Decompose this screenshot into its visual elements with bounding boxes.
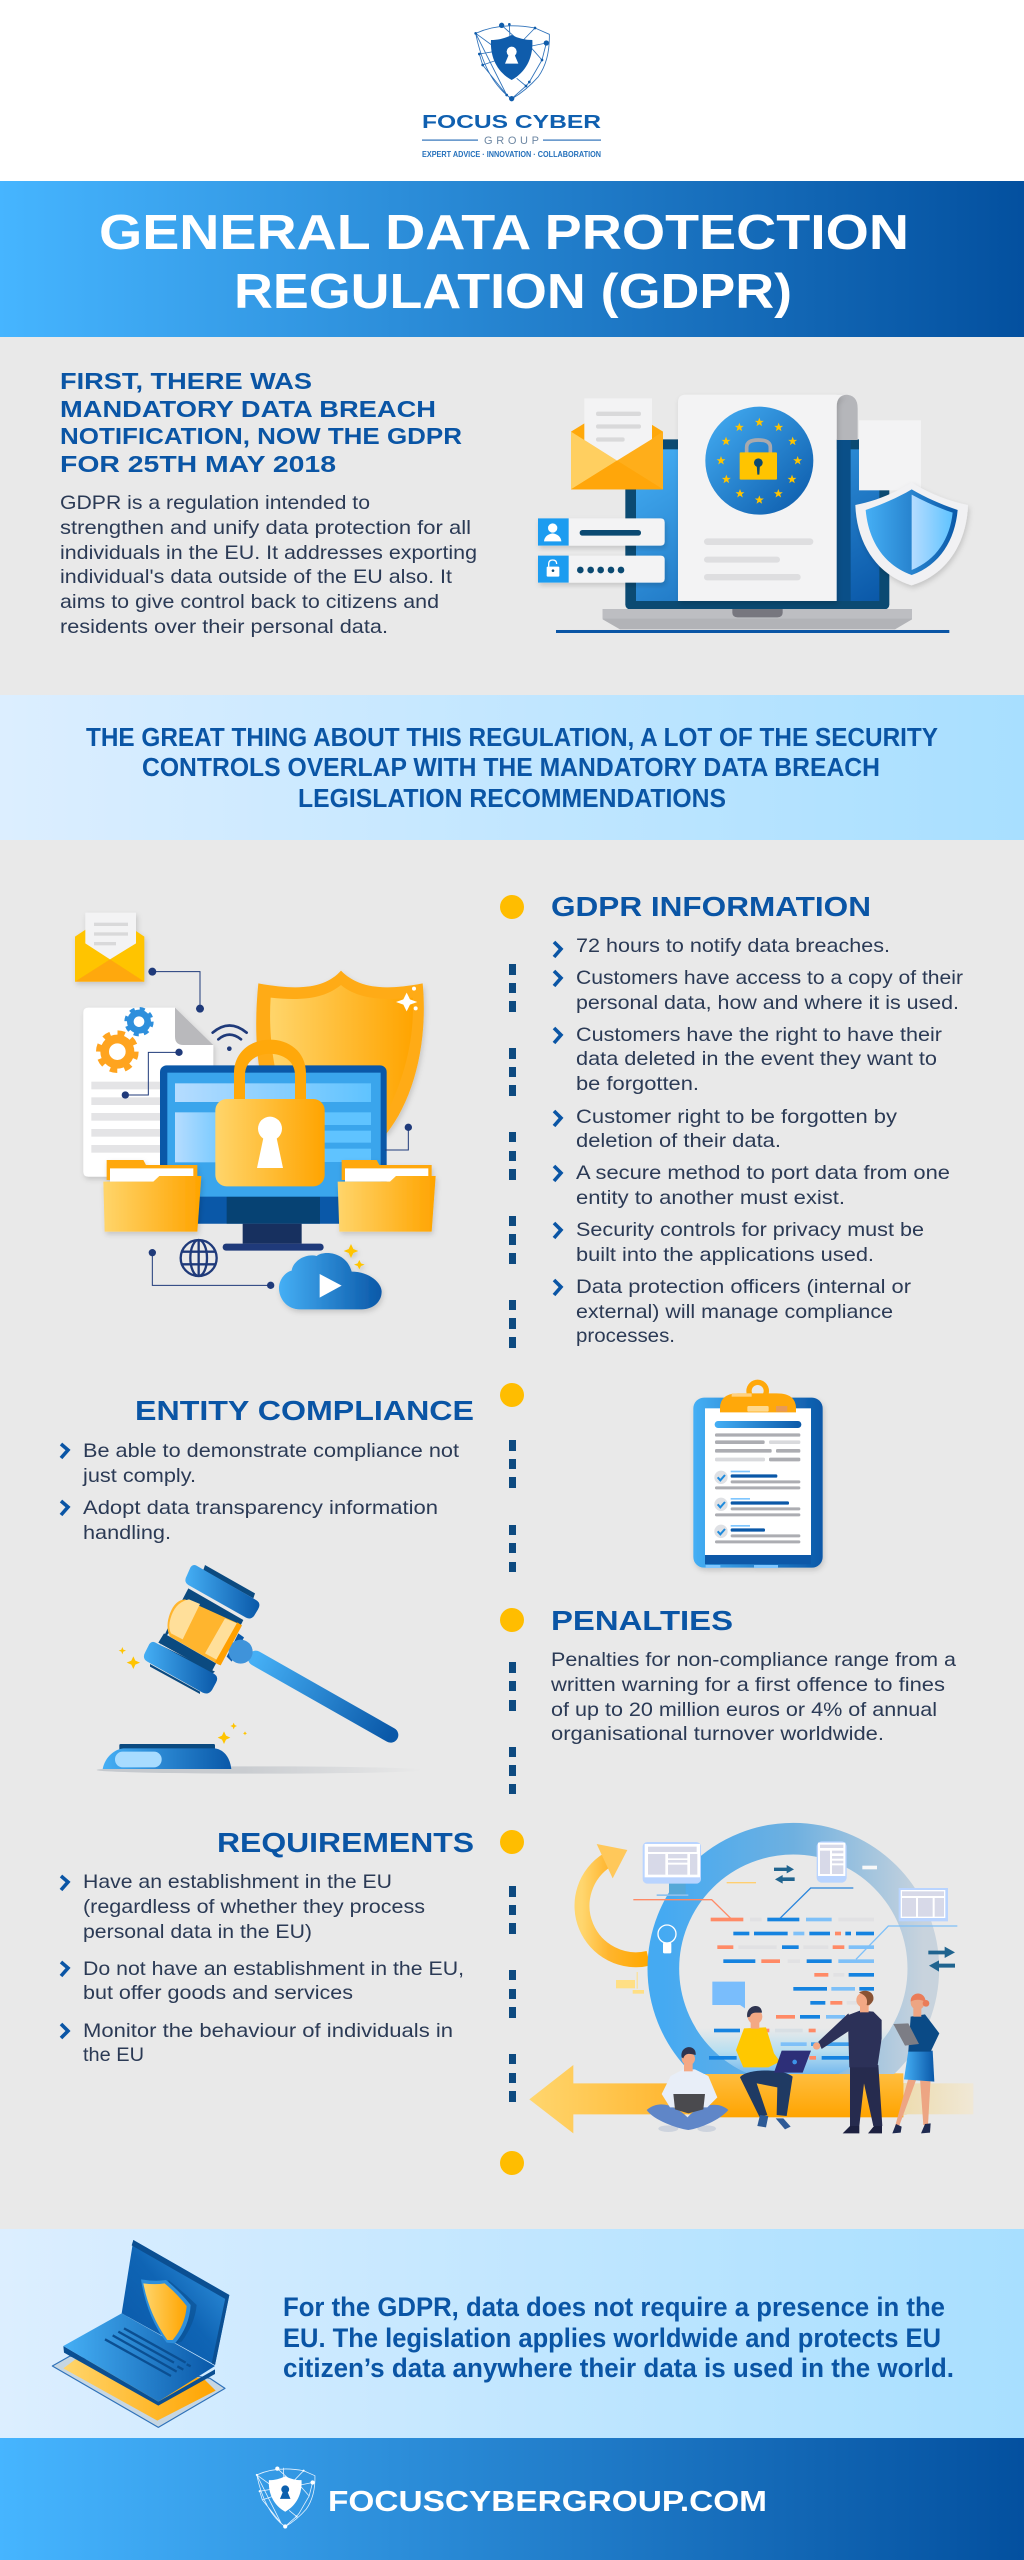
laptop base [63, 2313, 215, 2406]
list text: processes. [576, 1325, 675, 1347]
bullet marks [554, 942, 561, 1295]
list text: Do not have an establishment in the EU, [83, 1958, 464, 1980]
penalties text: Penalties for non-compliance range from a [551, 1649, 956, 1671]
list text: personal data in the EU) [83, 1921, 312, 1943]
closing band [0, 2229, 1024, 2438]
penalties text: written warning for a first offence to fines [550, 1674, 945, 1696]
EU badge with lock [705, 407, 813, 515]
intro body text: GDPR is a regulation intended to [60, 492, 370, 514]
clip [720, 1382, 796, 1412]
icon: swap arrows right [928, 1947, 955, 1972]
check item 2 [714, 1498, 800, 1516]
title: GENERAL DATA PROTECTION [99, 206, 909, 260]
illustration: laptop with EU privacy document [538, 395, 968, 633]
list text: just comply. [82, 1465, 196, 1487]
connector: globe to cloud [149, 1249, 274, 1289]
icon: wifi [213, 1025, 247, 1051]
sound block [97, 1744, 423, 1774]
logo header [0, 0, 1024, 181]
connector: email to document [148, 968, 204, 1013]
circular orange arrow [582, 1844, 648, 1994]
code lines [709, 1918, 874, 2060]
heading: entity compliance: ENTITY COMPLIANCE [135, 1395, 474, 1426]
clipboard board [693, 1398, 823, 1568]
check item 3 [714, 1525, 800, 1543]
list text: deletion of their data. [576, 1130, 781, 1152]
laptop [556, 439, 949, 633]
heading: requirements: REQUIREMENTS [217, 1827, 474, 1858]
gavel head [144, 1565, 259, 1694]
list text: Customer right to be forgotten by [576, 1106, 897, 1128]
title: REGULATION (GDPR) [234, 265, 792, 319]
list text: Adopt data transparency information [83, 1497, 438, 1519]
clipboard lines [715, 1421, 801, 1461]
intro heading: NOTIFICATION, NOW THE GDPR [60, 423, 462, 449]
title banner [0, 181, 1024, 337]
heading: GDPR information: GDPR INFORMATION [551, 891, 871, 922]
icon: monitor device [643, 1842, 701, 1896]
shield [256, 971, 424, 1133]
heading: penalties: PENALTIES [551, 1605, 733, 1636]
timeline [500, 895, 524, 2175]
intro body text [60, 492, 477, 638]
icon: phone device [817, 1841, 847, 1883]
logo tagline: EXPERT ADVICE · INNOVATION · COLLABORATION [422, 150, 601, 159]
right white tab [859, 420, 921, 490]
login field: user [538, 518, 665, 546]
requirements list [61, 1871, 464, 2066]
illustration: gavel [97, 1565, 423, 1774]
speech bubble [712, 1982, 745, 2008]
callout text: LEGISLATION RECOMMENDATIONS [298, 785, 726, 813]
callout text: THE GREAT THING ABOUT THIS REGULATION, A LOT OF THE SECURITY [86, 724, 938, 752]
list text: Have an establishment in the EU [83, 1871, 392, 1893]
intro heading [60, 368, 462, 477]
GDPR information list [554, 935, 964, 1347]
footer logo [256, 2466, 315, 2529]
illustration: laptop with shield [52, 2240, 229, 2427]
list text: Customers have access to a copy of their [576, 967, 964, 989]
closing text: citizen’s data anywhere their data is used in the world. [283, 2353, 954, 2383]
closing text [283, 2292, 954, 2383]
list text: but offer goods and services [83, 1982, 353, 2004]
list text: handling. [83, 1522, 171, 1544]
shield on screen [141, 2279, 197, 2343]
person: woman with tablet [892, 1994, 939, 2133]
right folder [338, 1160, 436, 1232]
connector: shield to monitor [385, 1124, 412, 1150]
list text: personal data, how and where it is used. [576, 992, 959, 1014]
list text: A secure method to port data from one [576, 1162, 950, 1184]
monitor [160, 1065, 387, 1251]
list text: 72 hours to notify data breaches. [576, 935, 890, 957]
callout text [86, 724, 938, 813]
large arrow [529, 2065, 973, 2133]
list text [83, 1871, 464, 2066]
callout lines [633, 1883, 957, 1959]
person: seated man with laptop [647, 2047, 728, 2132]
data ring [663, 1839, 923, 2099]
sheet under laptop [52, 2356, 225, 2427]
document with gears [83, 1008, 213, 1177]
padlock [215, 1040, 325, 1186]
white dash [862, 1866, 877, 1869]
email envelope [75, 913, 144, 982]
icon: orange gear [99, 1033, 136, 1070]
intro heading: FOR 25TH MAY 2018 [60, 451, 336, 477]
gavel handle [227, 1633, 391, 1735]
bullet marks [61, 1876, 68, 2038]
list text: entity to another must exist. [576, 1187, 845, 1209]
list text: Security controls for privacy must be [576, 1219, 924, 1241]
icon: swap arrows top [774, 1865, 795, 1884]
title [99, 206, 909, 319]
penalties text [550, 1649, 956, 1745]
icon: blue gear [126, 1009, 152, 1034]
callout text: CONTROLS OVERLAP WITH THE MANDATORY DATA BREACH [142, 754, 880, 782]
illustration: team and data ring [529, 1839, 973, 2133]
penalties text: organisational turnover worldwide. [551, 1723, 884, 1745]
intro heading: MANDATORY DATA BREACH [60, 396, 436, 422]
icon: window device [899, 1888, 948, 1921]
envelope [571, 398, 663, 489]
login field: password [538, 556, 665, 583]
entity compliance list [61, 1440, 460, 1544]
list text [82, 1440, 460, 1544]
connector: document [122, 1049, 183, 1099]
logo sub-brand: GROUP [484, 135, 539, 147]
intro body text: individuals in the EU. It addresses exporting [60, 542, 477, 564]
footer [0, 2438, 1024, 2560]
icon: light bulb [658, 1925, 676, 1953]
bullet marks [61, 1444, 68, 1515]
left folder [103, 1160, 201, 1232]
list text: Customers have the right to have their [576, 1024, 943, 1046]
closing text: EU. The legislation applies worldwide and protects EU [283, 2323, 941, 2353]
intro body text: individual's data outside of the EU also. It [60, 566, 453, 588]
person: man with laptop in yellow [736, 2006, 811, 2129]
list text: data deleted in the event they want to [576, 1048, 937, 1070]
list text: be forgotten. [576, 1073, 699, 1095]
check item 1 [714, 1471, 800, 1489]
list text: (regardless of whether they process [83, 1896, 425, 1918]
logo shield icon [474, 23, 549, 101]
icon: globe [181, 1240, 217, 1276]
person: standing man in suit [813, 1991, 882, 2133]
logo wordmark: FOCUS CYBER [422, 112, 601, 132]
closing text: For the GDPR, data does not require a presence in the [283, 2292, 945, 2322]
sparkles [119, 1647, 247, 1744]
intro body text: strengthen and unify data protection for all [60, 517, 471, 539]
callout band: overlap [0, 695, 1024, 840]
illustration: secure computer [75, 913, 436, 1309]
list text: Be able to demonstrate compliance not [83, 1440, 460, 1462]
list text: Monitor the behaviour of individuals in [83, 2020, 453, 2042]
intro body text: residents over their personal data. [60, 616, 388, 638]
icon: play cloud [279, 1244, 382, 1309]
intro body text: aims to give control back to citizens and [60, 591, 439, 613]
shield [855, 483, 968, 585]
intro heading: FIRST, THERE WAS [60, 368, 312, 394]
list text [576, 935, 964, 1347]
laptop keyboard [105, 2328, 191, 2376]
list text: external) will manage compliance [576, 1301, 893, 1323]
penalties text: of up to 20 million euros or 4% of annual [551, 1699, 937, 1721]
list text: the EU [83, 2044, 144, 2066]
list text: Data protection officers (internal or [576, 1276, 912, 1298]
scroll document [678, 395, 858, 601]
illustration: clipboard [693, 1382, 823, 1568]
laptop screen [122, 2240, 229, 2365]
list text: built into the applications used. [576, 1244, 874, 1266]
footer url: FOCUSCYBERGROUP.COM [328, 2486, 767, 2518]
